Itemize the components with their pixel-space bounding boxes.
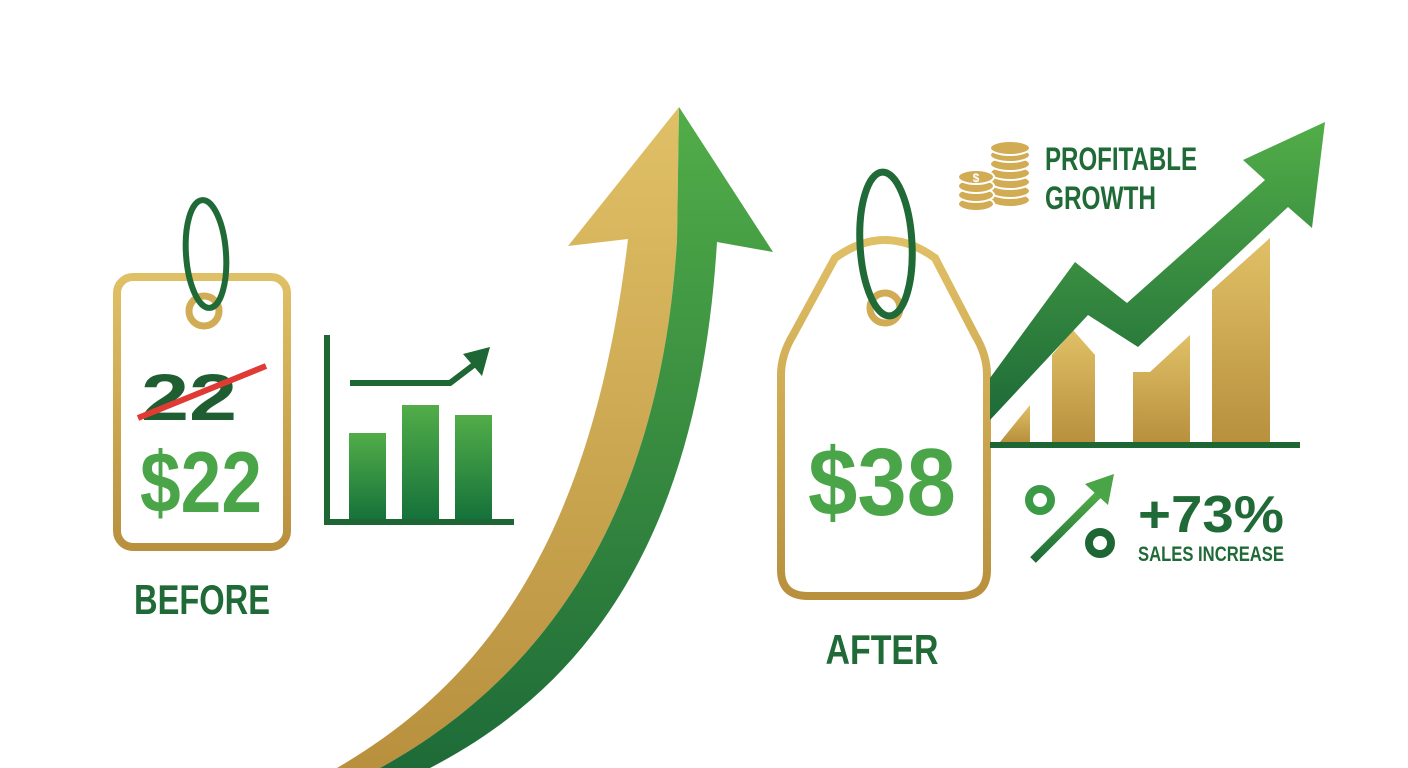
- icon: trend arrow: [350, 347, 490, 383]
- after price tag: [781, 171, 987, 596]
- profitable growth heading: GROWTH: [1045, 180, 1156, 216]
- stat: sales increase: +73%: [1138, 486, 1284, 544]
- stat: sales increase: SALES INCREASE: [1138, 543, 1284, 566]
- old price crossed: [138, 360, 266, 434]
- before price tag: [117, 199, 287, 547]
- icon: percent with arrow: [1029, 474, 1114, 560]
- icon: tag loop: [182, 199, 230, 309]
- growth chart: [990, 122, 1325, 448]
- icon: coins: [958, 141, 1030, 211]
- new price: $22: [140, 435, 262, 531]
- icon: coins: $: [973, 171, 980, 185]
- after label: AFTER: [826, 626, 938, 673]
- old price crossed: 22: [141, 360, 237, 434]
- big curved arrow: [337, 107, 773, 768]
- stat: sales increase: [1138, 486, 1284, 566]
- before label: BEFORE: [134, 576, 270, 623]
- profitable growth heading: PROFITABLE: [1045, 141, 1197, 177]
- profitable growth heading: [1045, 141, 1197, 216]
- icon: tag loop: [856, 171, 916, 317]
- zigzag arrow: [990, 122, 1325, 420]
- price: $38: [808, 429, 956, 536]
- small bar chart: [327, 335, 514, 523]
